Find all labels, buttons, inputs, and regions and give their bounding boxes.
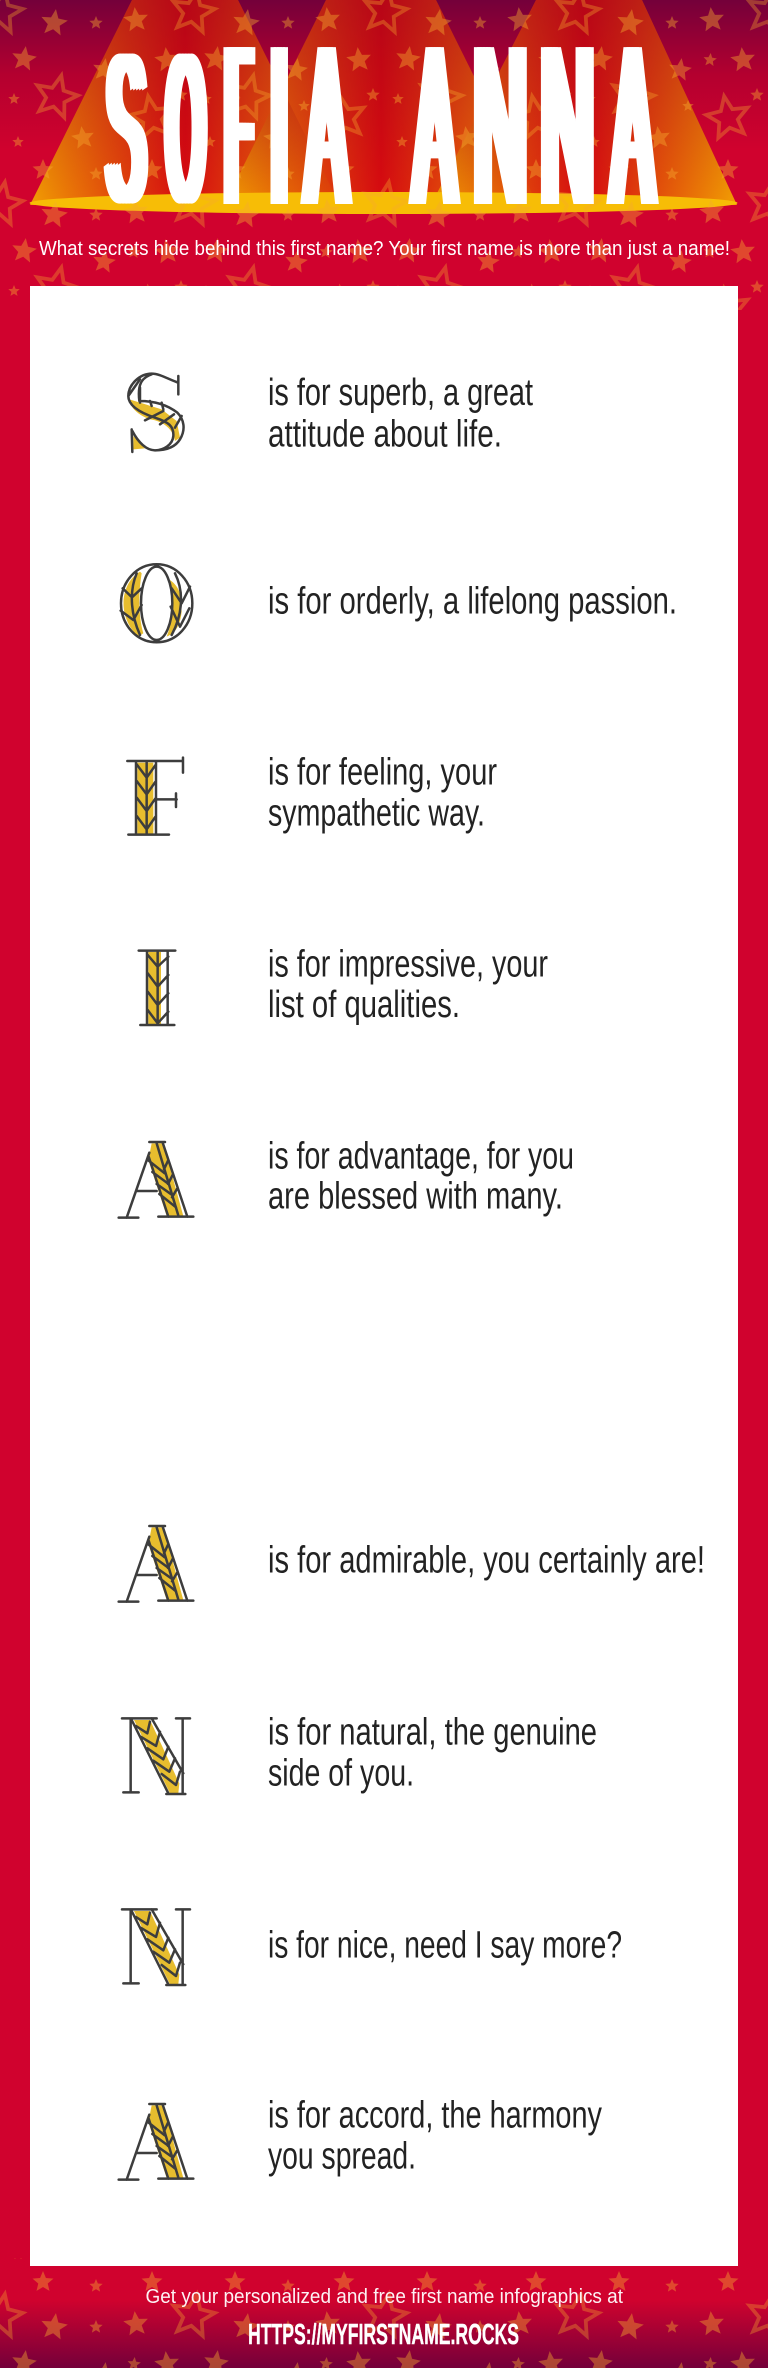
- icon: letter O: [121, 564, 192, 642]
- title: N: [541, 0, 594, 253]
- icon: letter A: [119, 1142, 193, 1218]
- title: A: [612, 0, 653, 253]
- title: N: [474, 0, 527, 253]
- text: F line: is for feeling, your: [268, 752, 497, 794]
- text: I line: is for impressive, your: [268, 944, 548, 986]
- text: I line: list of qualities.: [268, 984, 460, 1026]
- title: S: [106, 11, 145, 247]
- icon: letter A last: [119, 2104, 193, 2180]
- title: A: [414, 0, 455, 253]
- text: A line: [268, 1136, 574, 1218]
- subtitle: What secrets hide behind this first name? Your first name is more than just a name!: [39, 238, 730, 260]
- text: A line: are blessed with many.: [268, 1176, 563, 1218]
- title: F: [226, 0, 251, 253]
- text: S line: attitude about life.: [268, 414, 502, 456]
- footer url: HTTPS://MYFIRSTNAME.ROCKS: [248, 2319, 519, 2351]
- text: F line: [268, 752, 497, 834]
- text: I line: [268, 944, 548, 1026]
- icon: letter A second name: [119, 1526, 193, 1602]
- text: A line: is for advantage, for you: [268, 1136, 574, 1178]
- text: S line: [268, 372, 533, 456]
- title: I: [270, 0, 287, 253]
- text: A line last: [268, 2094, 602, 2178]
- text: A line last: you spread.: [268, 2136, 416, 2178]
- spotlights: [30, 0, 738, 214]
- icon: letter I: [139, 951, 175, 1025]
- title: [104, 0, 659, 253]
- icon: letter N: [122, 1718, 190, 1794]
- text: N line: is for natural, the genuine: [268, 1712, 597, 1754]
- text: N line second: is for nice, need I say more?: [268, 1924, 622, 1966]
- text: N line: [268, 1712, 597, 1794]
- icon: letter N second: [122, 1909, 190, 1985]
- title: O: [167, 11, 204, 247]
- footer star pattern: [0, 2258, 768, 2368]
- text: S line: is for superb, a great: [268, 372, 533, 414]
- text: A line last: is for accord, the harmony: [268, 2094, 602, 2136]
- icon: letter F: [127, 758, 183, 835]
- text: F line: sympathetic way.: [268, 792, 485, 834]
- icon: letter S: [128, 374, 184, 452]
- title: A: [306, 0, 344, 253]
- text: N line: side of you.: [268, 1752, 414, 1794]
- header star pattern: [0, 0, 768, 310]
- panel: white content card: [30, 286, 738, 2266]
- footer call to action: Get your personalized and free first name infographics at: [146, 2286, 623, 2308]
